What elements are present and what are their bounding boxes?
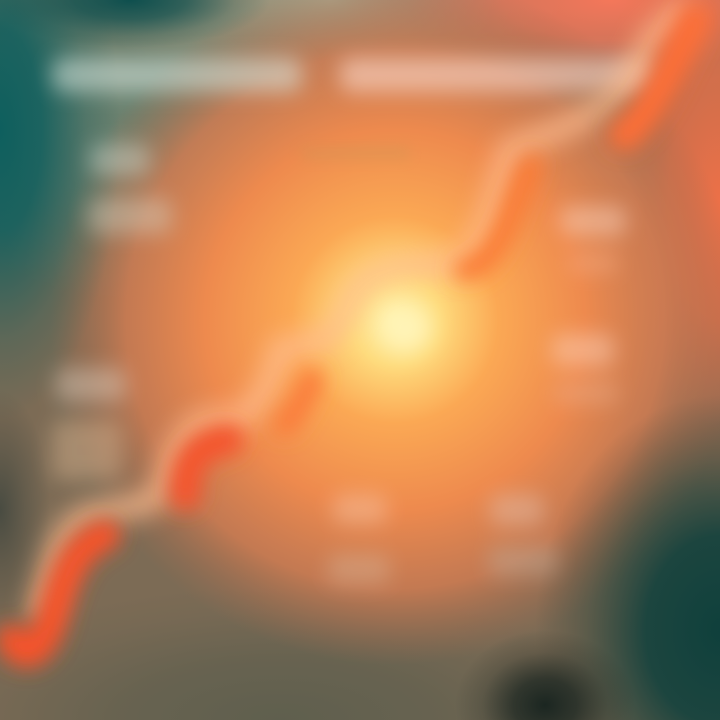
- label block: middle right: [552, 334, 618, 404]
- label block: bottom centre: [328, 494, 390, 584]
- label block: top right: [560, 206, 626, 272]
- rising wavy line: pale halo: [40, 12, 680, 610]
- title (illegible in reference): [52, 58, 656, 92]
- central glow highlight: [379, 304, 431, 352]
- label block: middle left: [52, 368, 126, 480]
- label block: bottom right: [488, 494, 558, 576]
- label block: top left: [88, 144, 172, 234]
- label block: top centre: [300, 146, 410, 160]
